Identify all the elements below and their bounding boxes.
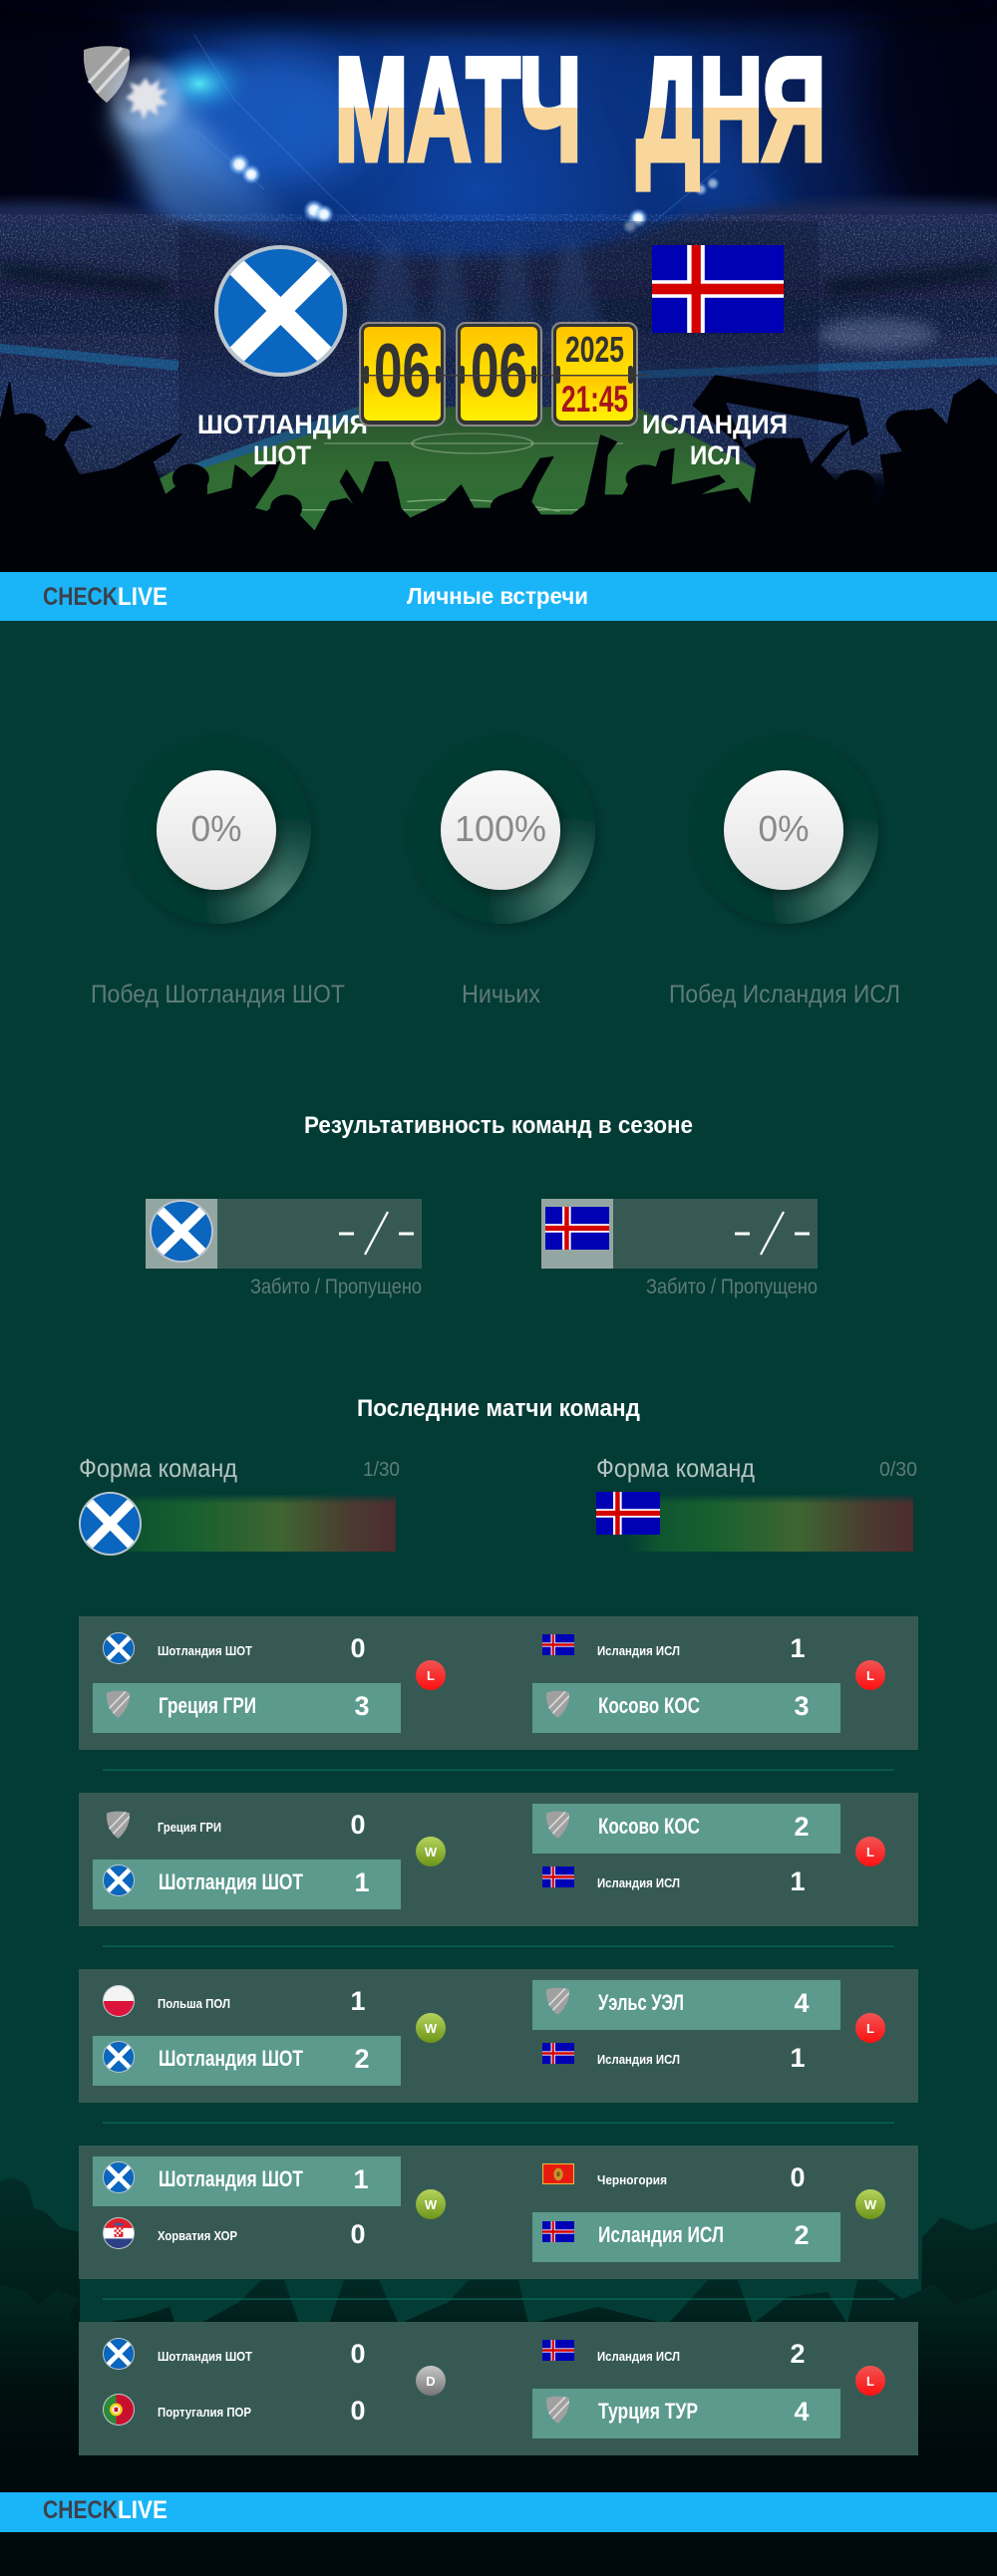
left match: Португалия ПОР — [158, 2405, 251, 2420]
flip hinge line — [361, 375, 649, 376]
right match: Косово КОС — [598, 1693, 700, 1718]
match row 3 — [79, 1969, 918, 2103]
title: МАТЧ — [335, 28, 581, 190]
left match: Шотландия ШОТ — [159, 2046, 303, 2071]
right match: 1 — [790, 1866, 806, 1896]
right match: L — [866, 2374, 874, 2389]
stands — [0, 201, 997, 478]
right match: Исландия ИСЛ — [597, 2052, 680, 2067]
right match — [532, 1804, 885, 1896]
right match: 2 — [794, 1812, 810, 1842]
right match: Турция ТУР — [598, 2399, 698, 2424]
dial labels: Побед Шотландия ШОТ — [91, 981, 345, 1008]
logo: CheckLive: LIVE — [118, 583, 167, 611]
left match: Шотландия ШОТ — [159, 2166, 303, 2191]
right match: 4 — [794, 2397, 810, 2427]
dial labels: Ничьих — [462, 981, 540, 1008]
left match: Хорватия ХОР — [158, 2228, 237, 2243]
right match: W — [864, 2197, 877, 2212]
left match: 1 — [354, 1867, 370, 1897]
right match: 4 — [794, 1988, 810, 2018]
stat box: Iceland goals: Забито / Пропущено — [646, 1276, 818, 1298]
left match — [93, 1632, 446, 1733]
left match: 0 — [350, 2339, 366, 2369]
right match: Косово КОС — [598, 1814, 700, 1839]
match row 1 — [79, 1616, 918, 1750]
form panel: Scotland — [79, 1453, 400, 1556]
right match: Исландия ИСЛ — [597, 2349, 680, 2364]
left match: L — [427, 1668, 435, 1683]
stat dial: draws: 100% — [455, 808, 546, 849]
left match: 0 — [350, 1810, 366, 1840]
dial labels — [91, 981, 900, 1008]
left match: 0 — [350, 1633, 366, 1663]
stat dial: Scotland wins — [124, 736, 311, 924]
lamps — [228, 153, 250, 175]
background crowd silhouette — [0, 2178, 997, 2576]
pitch — [77, 407, 890, 572]
team name: Scotland — [197, 410, 368, 470]
crowd silhouette — [0, 376, 997, 572]
left match: Шотландия ШОТ — [158, 2349, 252, 2364]
flip date: year and time — [552, 323, 637, 426]
left match: W — [425, 2197, 438, 2212]
flip date: month: 06 — [471, 329, 527, 414]
team name: Scotland: ШОТ — [253, 440, 311, 470]
left match: D — [426, 2374, 436, 2389]
team flag: Iceland — [652, 245, 784, 333]
left match: Шотландия ШОТ — [158, 1643, 252, 1658]
stat box: Scotland goals: Забито / Пропущено — [250, 1276, 422, 1298]
flip date: year and time: 2025 — [565, 329, 624, 370]
right match: 2 — [790, 2339, 806, 2369]
footer bar — [0, 2492, 997, 2532]
form panel: Iceland: 0/30 — [879, 1459, 917, 1481]
heading: head to head: Личные встречи — [407, 583, 588, 609]
right match: L — [866, 1668, 874, 1683]
left match: Греция ГРИ — [159, 1693, 256, 1718]
form panel: Iceland: Форма команд — [596, 1453, 755, 1483]
left match — [103, 2338, 446, 2426]
team name: Iceland — [642, 410, 788, 470]
panel: match overlay — [178, 221, 819, 472]
top bar — [0, 572, 997, 621]
dial labels: Побед Исландия ИСЛ — [669, 981, 900, 1008]
right match: 0 — [790, 2162, 806, 2192]
right match — [532, 2162, 885, 2262]
icon: floodlight star — [110, 62, 181, 134]
left match — [93, 2156, 446, 2249]
team crest: Scotland — [214, 245, 347, 377]
team name: Scotland: ШОТЛАНДИЯ — [197, 410, 368, 439]
stat box: Scotland goals — [146, 1199, 422, 1298]
heading: season performance: Результативность команд в сезоне — [304, 1112, 693, 1139]
flip date: year and time: 21:45 — [561, 379, 628, 420]
flip date: day — [360, 323, 445, 426]
logo: CheckLive footer: LIVE — [118, 2496, 167, 2524]
left match: W — [425, 2021, 438, 2036]
flip date: day: 06 — [374, 329, 431, 414]
flip date: month — [457, 323, 541, 426]
left match — [93, 1810, 446, 1909]
right match: 1 — [790, 2043, 806, 2073]
title: ДНЯ — [637, 28, 826, 190]
left match: 0 — [350, 2396, 366, 2426]
left match: Польша ПОЛ — [158, 1996, 230, 2011]
left match: 1 — [353, 2164, 369, 2194]
right match: 3 — [794, 1691, 810, 1721]
left match: 1 — [350, 1986, 366, 2016]
left match: Шотландия ШОТ — [159, 1869, 303, 1894]
right match: Исландия ИСЛ — [597, 1875, 680, 1890]
stat box: Iceland goals — [541, 1199, 818, 1298]
match row 5 — [79, 2322, 918, 2455]
header: stadium background — [0, 0, 997, 572]
right match: 1 — [790, 1633, 806, 1663]
heading: recent matches: Последние матчи команд — [357, 1395, 640, 1422]
logo: CheckLive footer: CHECK — [43, 2496, 118, 2524]
team name: Iceland: ИСЛ — [690, 440, 741, 470]
team name: Iceland: ИСЛАНДИЯ — [642, 410, 788, 439]
form panel: Scotland: Форма команд — [79, 1453, 237, 1483]
left match: 0 — [350, 2219, 366, 2249]
right match — [532, 1633, 885, 1733]
match row 2 — [79, 1793, 918, 1926]
left match: 2 — [354, 2044, 370, 2074]
stat dial: Iceland wins: 0% — [758, 808, 810, 849]
stat dial: draws — [408, 736, 595, 924]
right match: Уэльс УЭЛ — [598, 1990, 684, 2015]
icon: gray shield logo — [84, 46, 130, 103]
right match: Исландия ИСЛ — [597, 1643, 680, 1658]
right match — [532, 1980, 885, 2073]
right match: 2 — [794, 2220, 810, 2250]
left match: Греция ГРИ — [158, 1820, 221, 1835]
logo: CheckLive: CHECK — [43, 583, 118, 611]
left match: W — [425, 1845, 438, 1860]
left match — [93, 1985, 446, 2086]
form panel: Scotland: 1/30 — [363, 1459, 400, 1481]
right match: Исландия ИСЛ — [598, 2222, 724, 2247]
right match: L — [866, 1845, 874, 1860]
form panel: Iceland — [596, 1453, 917, 1552]
stat dial: Iceland wins — [691, 736, 878, 924]
right match: Черногория — [597, 2172, 667, 2187]
right match: L — [866, 2021, 874, 2036]
match row 4 — [79, 2146, 918, 2279]
right match — [532, 2339, 885, 2438]
stat dial: Scotland wins: 0% — [191, 808, 241, 849]
left match: 3 — [354, 1691, 370, 1721]
